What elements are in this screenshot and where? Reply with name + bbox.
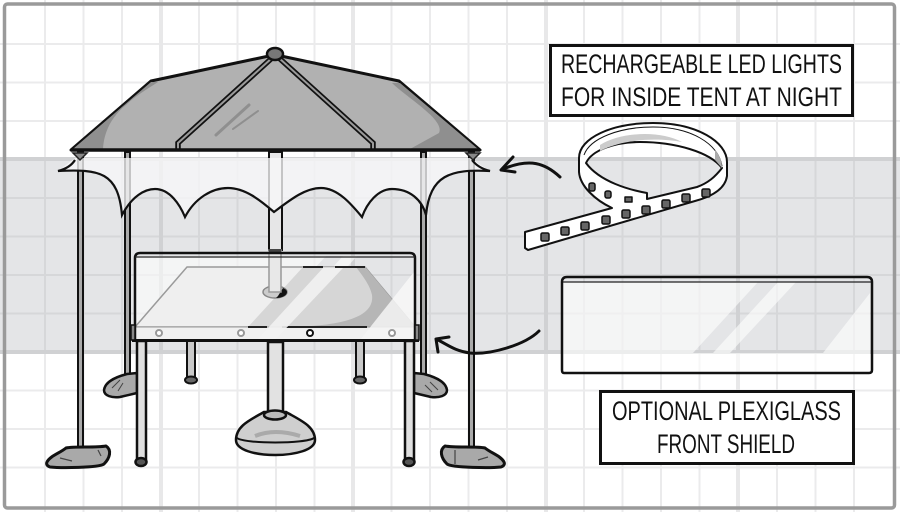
table clips — [131, 325, 419, 340]
screws — [156, 330, 395, 336]
roof ribs — [178, 58, 373, 149]
edge reflections — [248, 266, 367, 328]
valance scalloped edge — [58, 160, 490, 217]
shield frame — [135, 253, 415, 340]
grey background band — [0, 158, 900, 353]
arrow to tent — [501, 157, 560, 177]
pole through table hole — [263, 249, 287, 298]
callout: plexiglass: FRONT SHIELD — [657, 429, 795, 459]
rear strip LEDs — [589, 183, 632, 202]
strip body with ring hole — [525, 123, 727, 250]
pole brackets — [73, 153, 480, 160]
roof sheen — [216, 105, 258, 135]
table — [131, 249, 419, 466]
back sand bags — [104, 373, 447, 397]
glass outline — [562, 277, 872, 373]
central umbrella pole — [269, 152, 282, 250]
icon: LED strip — [525, 123, 727, 250]
callout: LED lights — [550, 46, 852, 116]
light streak — [257, 268, 343, 340]
roof shading — [73, 82, 478, 149]
roof bottom edge — [71, 148, 480, 152]
front sand bags — [47, 446, 504, 468]
callout: plexiglass — [600, 392, 854, 464]
umbrella base — [236, 342, 315, 455]
roof canopy — [71, 56, 480, 150]
table bottom edge — [132, 339, 419, 342]
front strip LEDs — [541, 189, 710, 241]
translucent valance — [58, 158, 490, 217]
roof top knob — [267, 48, 283, 60]
back table legs — [185, 341, 366, 384]
table shield backing — [135, 256, 414, 340]
front table legs — [136, 341, 414, 466]
table front edge — [135, 327, 415, 340]
ring inner edge — [584, 127, 722, 166]
dark right side of table top — [248, 267, 415, 340]
panel: plexiglass shield — [562, 277, 872, 373]
front sand bag creases — [60, 450, 488, 464]
table top surface — [135, 267, 415, 327]
ring shading — [600, 134, 682, 151]
arrow to table shield — [436, 331, 539, 353]
glass reflections — [563, 282, 870, 373]
back sand bag creases — [112, 380, 438, 392]
front poles — [78, 152, 474, 452]
back poles — [125, 152, 426, 378]
tent — [47, 48, 504, 468]
